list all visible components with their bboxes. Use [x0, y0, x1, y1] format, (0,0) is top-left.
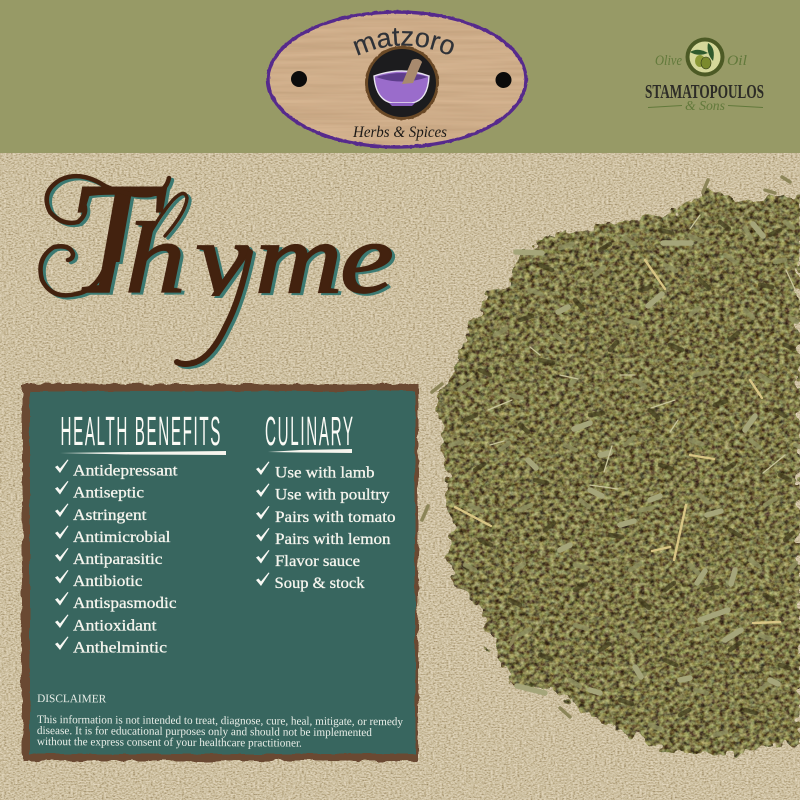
disclaimer heading: DISCLAIMER	[37, 693, 106, 705]
panel: health benefits and culinary board	[22, 384, 418, 761]
list: health benefits	[55, 460, 178, 656]
heading: culinary: CULINARY	[265, 408, 353, 454]
logo tagline: Herbs & Spices	[352, 124, 447, 141]
logo wordmark: matzoro	[353, 28, 454, 56]
item: Antidepressant	[73, 462, 178, 480]
brand word oil: Oil	[727, 53, 747, 69]
pile loose fragments	[422, 177, 790, 717]
icon: olive badge	[686, 38, 724, 76]
item: Anthelmintic	[73, 640, 167, 656]
title: Thyme: T	[68, 149, 167, 327]
disclaimer	[37, 693, 403, 750]
heading underline	[60, 451, 226, 455]
pile thin pale stems	[488, 215, 800, 489]
item: Use with poultry	[275, 486, 390, 504]
panel green board	[30, 391, 415, 754]
item: Pairs with lemon	[275, 531, 390, 548]
check marks	[55, 460, 68, 650]
logo left hole	[291, 71, 307, 87]
item: Antispasmodic	[73, 595, 176, 612]
title: Thyme	[40, 149, 394, 364]
logo: matzoro herbs and spices	[266, 10, 528, 149]
logo right hole	[496, 72, 512, 88]
item: Pairs with tomato	[275, 509, 396, 526]
item: Astringent	[73, 507, 147, 524]
item: Antiseptic	[73, 484, 144, 502]
pile large pale leaves	[516, 224, 778, 693]
disclaimer body: without the express consent of your healthcare practitioner.	[37, 736, 302, 750]
icon: mortar and pestle	[365, 46, 439, 120]
heading: health benefits: HEALTH BENEFITS	[60, 408, 220, 454]
item: Antibiotic	[73, 573, 142, 590]
culinary underline	[268, 449, 352, 453]
item: Flavor sauce	[275, 553, 360, 570]
item: Antiparasitic	[73, 551, 162, 568]
item: Antioxidant	[73, 618, 157, 634]
item: Soup & stock	[274, 575, 364, 592]
logo wood oval	[268, 12, 526, 148]
logo: stamatopoulos and sons olive oil	[645, 38, 764, 113]
brand word olive: Olive	[655, 53, 682, 69]
logo purple rim	[268, 12, 526, 147]
disclaimer body: disease. It is for educational purposes only and should not be implemented	[37, 725, 372, 739]
list: culinary	[256, 462, 396, 592]
title: Thyme: hyme	[125, 203, 394, 315]
disclaimer body: This information is not intended to treat, diagnose, cure, heal, mitigate, or remedy	[37, 714, 403, 728]
title swashes	[40, 176, 250, 364]
pile straw stems	[455, 260, 780, 623]
panel brown frame	[22, 384, 418, 761]
item: Use with lamb	[275, 464, 374, 482]
check marks	[256, 462, 270, 586]
brand suffix: & Sons	[685, 98, 725, 113]
item: Antimicrobial	[73, 529, 171, 546]
pile texture	[437, 190, 800, 755]
herb pile	[422, 177, 800, 755]
pile mid leaves	[450, 222, 800, 735]
header band	[0, 0, 800, 153]
pile dark leaves	[465, 222, 794, 715]
